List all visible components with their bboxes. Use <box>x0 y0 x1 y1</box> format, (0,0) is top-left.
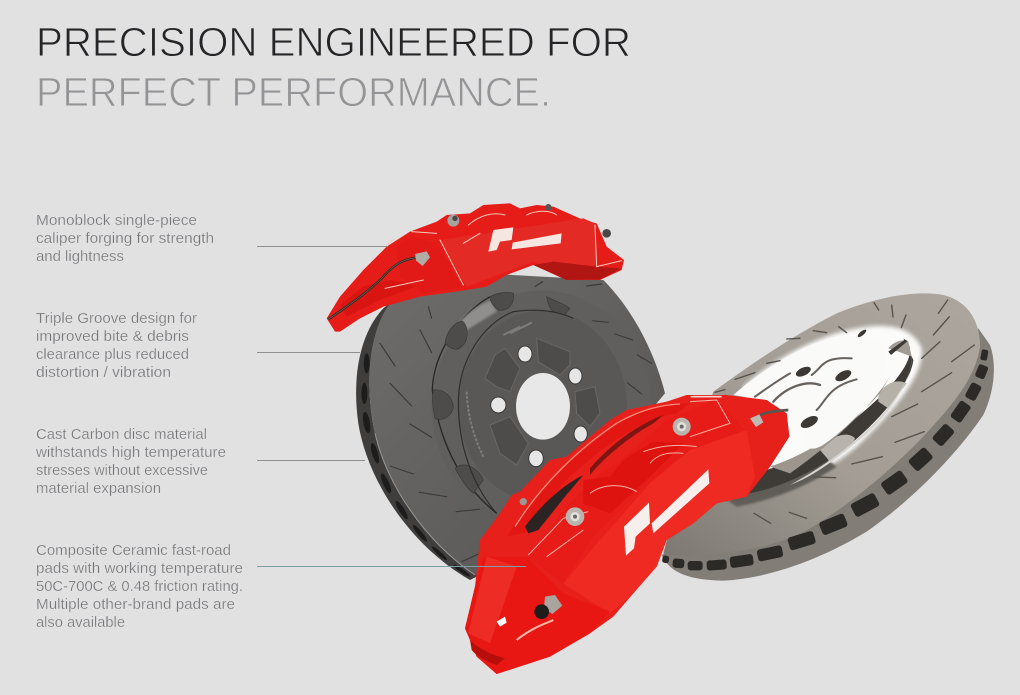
text block: composite ceramic: Multiple other-brand pads are <box>36 596 235 613</box>
hat dark rim <box>720 338 913 502</box>
disc friction face <box>369 273 665 575</box>
leader line: caliper <box>257 246 388 248</box>
ring highlight <box>460 300 497 330</box>
bright highlight band <box>743 326 922 490</box>
brand mark <box>503 323 532 335</box>
hat centre white plate <box>733 336 887 449</box>
text block: cast carbon: stresses without excessive <box>36 462 208 479</box>
stud holes <box>491 346 587 467</box>
arch bridge <box>507 403 690 537</box>
vents <box>662 349 989 571</box>
banjo fitting <box>415 251 430 266</box>
window openings <box>525 475 583 533</box>
title <box>36 19 631 115</box>
title: PERFECT PERFORMANCE. <box>36 69 551 115</box>
vents <box>361 353 471 578</box>
caliper body <box>465 395 789 674</box>
text block: composite ceramic: also available <box>36 614 125 631</box>
hat scallops <box>433 292 570 493</box>
title: PRECISION ENGINEERED FOR <box>36 19 631 65</box>
text block: triple groove <box>36 310 197 381</box>
text block: triple groove: Triple Groove design for <box>36 310 197 327</box>
disc face <box>663 293 980 556</box>
hat silver ring <box>790 353 912 485</box>
centre bore <box>516 373 570 440</box>
wing shading <box>340 280 420 317</box>
logo <box>624 503 650 556</box>
text block: triple groove: distortion / vibration <box>36 364 171 381</box>
text block: composite ceramic: Composite Ceramic fast-road <box>36 542 231 559</box>
top rim highlight <box>691 394 722 399</box>
inner sculpted body <box>527 400 747 583</box>
text block: triple groove: clearance plus reduced <box>36 346 189 363</box>
hat slots <box>755 358 857 410</box>
dark shadow under hat <box>727 457 837 507</box>
leader line: disc <box>257 460 365 462</box>
grooves <box>380 282 652 562</box>
text block: monoblock caliper: caliper forging for strength <box>36 230 214 247</box>
bolts <box>520 418 691 526</box>
grooves <box>715 300 974 523</box>
hub pads <box>485 338 600 465</box>
right brake disc <box>662 293 994 581</box>
caliper body <box>327 203 624 332</box>
face rim highlight <box>375 433 475 575</box>
bolts <box>447 215 459 227</box>
outer side face <box>563 430 757 613</box>
left brake disc <box>356 273 665 580</box>
text block: monoblock caliper: and lightness <box>36 248 124 265</box>
leader line: groove <box>257 352 360 354</box>
leader line: pads <box>257 566 526 568</box>
highlight rim <box>385 211 622 288</box>
rear red caliper <box>327 203 624 332</box>
text block: composite ceramic: 50C-700C & 0.48 friction rating. <box>36 578 243 595</box>
bleed nipple <box>544 595 562 614</box>
hub engraving <box>467 392 483 457</box>
text block: monoblock caliper <box>36 212 214 265</box>
front red caliper <box>465 395 789 674</box>
text block: composite ceramic: pads with working temperature <box>36 560 243 577</box>
nose <box>465 557 610 674</box>
top face <box>440 218 597 287</box>
text block: cast carbon: withstands high temperature <box>35 444 226 461</box>
text block: cast carbon <box>35 426 226 497</box>
hat inner hub <box>458 311 627 503</box>
brake line fitting <box>760 410 788 415</box>
text block: monoblock caliper: Monoblock single-piece <box>36 212 197 229</box>
disc side edge <box>356 300 490 580</box>
text block: cast carbon: Cast Carbon disc material <box>36 426 207 443</box>
text block: composite ceramic <box>36 542 243 631</box>
hat outer ring <box>432 291 652 524</box>
text block: triple groove: improved bite & debris <box>36 328 189 345</box>
logo <box>488 227 513 252</box>
brake line <box>328 257 420 319</box>
disc underside <box>662 328 994 581</box>
text block: cast carbon: material expansion <box>36 480 161 497</box>
